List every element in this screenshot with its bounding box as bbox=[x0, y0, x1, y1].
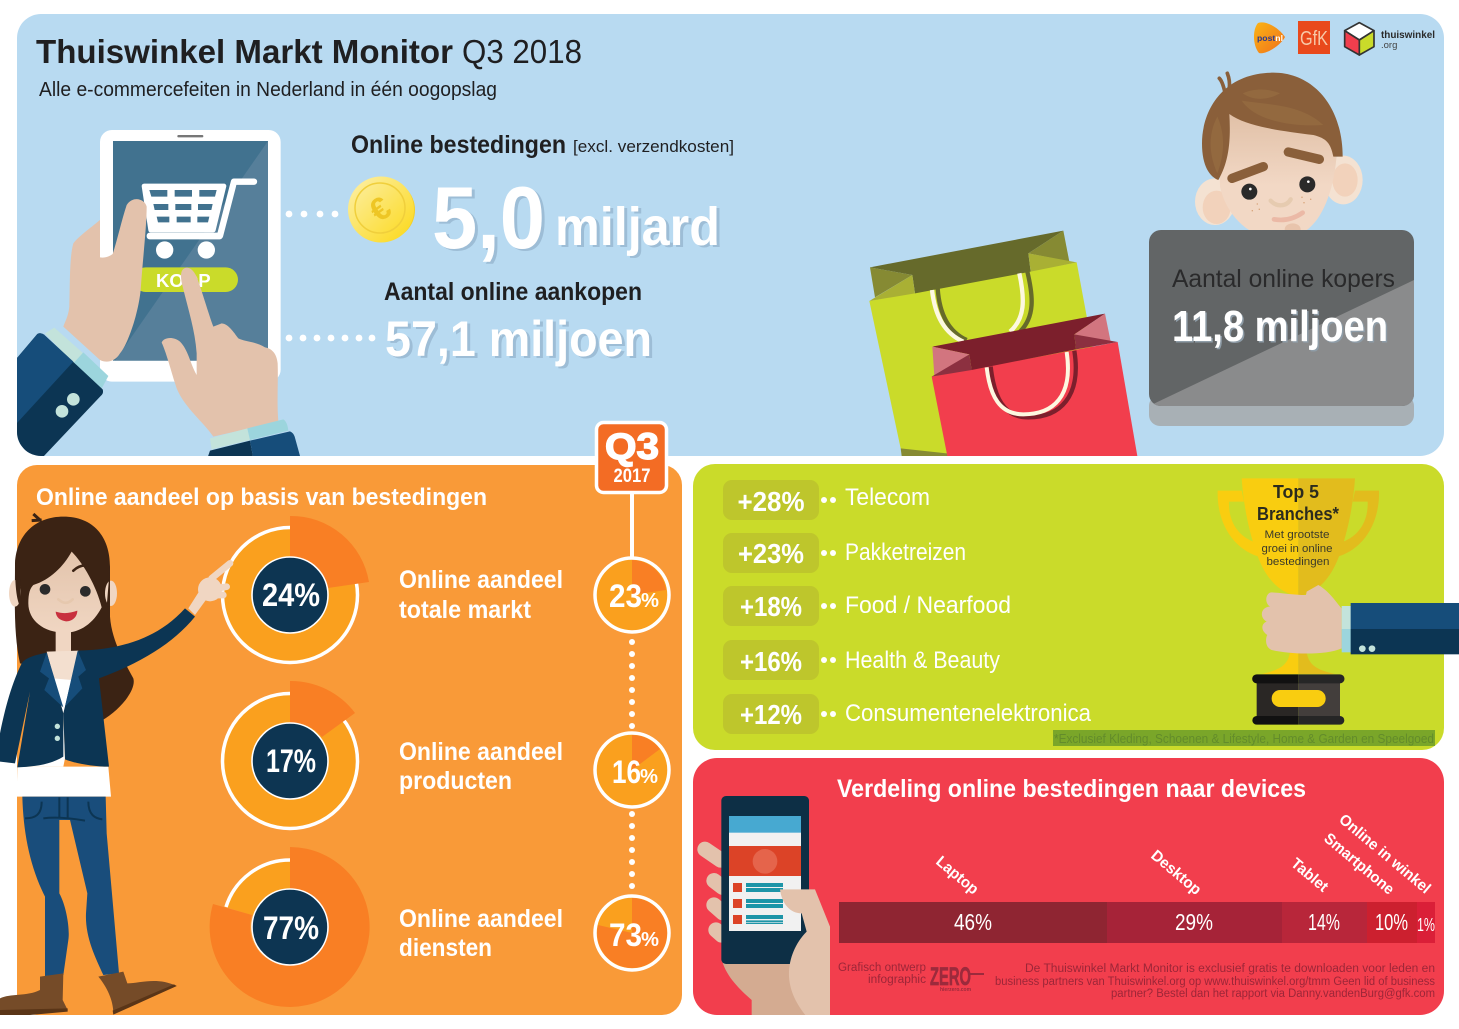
axis label: desktop: Desktop bbox=[1147, 847, 1204, 899]
trophy heading: Top 5 bbox=[1273, 482, 1319, 502]
donut: totale markt bbox=[222, 516, 369, 662]
subtitle: Alle e-commercefeiten in Nederland in één oogopslag bbox=[39, 79, 497, 101]
trophy subtext: groei in online bbox=[1262, 543, 1332, 555]
pie: 2017 totale markt bbox=[595, 558, 669, 632]
row: telecom: +28% bbox=[738, 486, 805, 517]
logo: Thuiswinkel.org: thuiswinkel bbox=[1381, 29, 1435, 41]
heading: online bestedingen: Online bestedingen bbox=[351, 131, 566, 159]
footer note: business partners van Thuiswinkel.org op www.thuiswinkel.org/tmm Geen lid of business bbox=[995, 976, 1435, 988]
footer note bbox=[995, 963, 1435, 1000]
label: aantal online kopers: Aantal online kopers bbox=[1172, 265, 1395, 293]
illustration: hands holding tablet: KOOP bbox=[156, 270, 211, 291]
pie: 2017 producten: 16 bbox=[612, 754, 641, 790]
connector dots: purchases bbox=[286, 335, 375, 341]
pie: 2017 totale markt: % bbox=[641, 590, 659, 612]
credit: design: Grafisch ontwerp bbox=[838, 962, 926, 974]
pie: 2017 diensten: % bbox=[641, 929, 659, 951]
trophy subtext: Met grootste bbox=[1264, 529, 1330, 541]
label: diensten: Online aandeel bbox=[399, 905, 563, 933]
pie: 2017 diensten: 73 bbox=[609, 917, 642, 953]
row: pakketreizen: +23% bbox=[738, 538, 804, 569]
pie: 2017 producten: % bbox=[640, 766, 658, 788]
credit: design: infographic bbox=[868, 974, 926, 986]
label: totale markt bbox=[399, 566, 563, 624]
axis label: laptop: Laptop bbox=[932, 853, 982, 898]
logo: Thuiswinkel.org bbox=[1345, 23, 1435, 55]
footer note: De Thuiswinkel Markt Monitor is exclusief gratis te downloaden voor leden en bbox=[1025, 963, 1435, 975]
illustration: shopping bags bbox=[869, 231, 1137, 456]
panel: top summary bbox=[17, 14, 1444, 458]
value: in-store: 1% bbox=[1417, 915, 1435, 935]
row: electronics bbox=[723, 694, 1091, 734]
stacked bar bbox=[839, 902, 1435, 943]
trophy heading: Branches* bbox=[1257, 504, 1339, 524]
logo: PostNL bbox=[1254, 22, 1285, 53]
row: electronics: +12% bbox=[740, 699, 802, 730]
illustration: trophy held by hand bbox=[1218, 478, 1459, 725]
panel: online share bbox=[17, 422, 682, 1015]
illustration: hands holding tablet bbox=[17, 130, 301, 458]
heading: aantal online aankopen: Aantal online aankopen bbox=[384, 278, 642, 306]
label: totale markt: totale markt bbox=[399, 596, 532, 624]
row: health: Health & Beauty bbox=[845, 647, 1001, 674]
heading: online bestedingen bbox=[351, 131, 734, 159]
donut: diensten: 77% bbox=[263, 910, 319, 946]
axis label: tablet: Tablet bbox=[1287, 855, 1331, 896]
illustration: woman pointing bbox=[0, 514, 230, 1015]
row: pakketreizen: Pakketreizen bbox=[845, 539, 966, 566]
title: Thuiswinkel Markt Monitor bbox=[36, 33, 453, 70]
stat: 57,1 miljoen: 57,1 miljoen bbox=[385, 311, 652, 367]
donut: producten: 17% bbox=[266, 743, 316, 779]
label: totale markt: Online aandeel bbox=[399, 566, 563, 594]
stat: 5,0 miljard: 5,0 bbox=[432, 168, 545, 267]
row: food bbox=[723, 586, 1011, 626]
donut: producten bbox=[222, 681, 358, 828]
value: desktop: 29% bbox=[1175, 909, 1213, 935]
timeline connector bbox=[629, 492, 635, 889]
row: telecom: Telecom bbox=[845, 484, 930, 511]
donut: diensten bbox=[210, 847, 370, 1007]
pie: 2017 totale markt: 23 bbox=[609, 578, 642, 614]
panel: top 5 sectors bbox=[693, 464, 1459, 750]
label: diensten: diensten bbox=[399, 934, 492, 962]
badge: Q3 2017: 2017 bbox=[614, 466, 650, 487]
trophy heading bbox=[1257, 482, 1339, 524]
connector dots: spend bbox=[286, 211, 338, 217]
value: laptop: 46% bbox=[954, 909, 992, 935]
heading: devices: Verdeling online bestedingen naar devices bbox=[837, 775, 1306, 803]
logo: PostNL: postnl bbox=[1257, 33, 1283, 43]
illustration: hand holding phone bbox=[705, 796, 830, 1017]
trophy subtext: bestedingen bbox=[1266, 556, 1330, 568]
row: food: +18% bbox=[740, 591, 802, 622]
trophy subtext bbox=[1262, 529, 1332, 568]
row: health: +16% bbox=[740, 646, 802, 677]
credit: design bbox=[838, 962, 926, 986]
stat: 5,0 miljard: miljard bbox=[555, 197, 720, 257]
pie: 2017 diensten bbox=[595, 896, 669, 970]
row: food: Food / Nearfood bbox=[845, 592, 1011, 619]
row: health bbox=[723, 640, 1001, 680]
value: smartphone: 10% bbox=[1375, 909, 1408, 935]
heading: online bestedingen: [excl. verzendkosten] bbox=[573, 137, 734, 156]
row: telecom bbox=[723, 480, 930, 520]
panel: devices bbox=[693, 758, 1444, 1017]
logo: Thuiswinkel.org: .org bbox=[1381, 40, 1397, 51]
badge: Q3 2017 bbox=[596, 422, 666, 492]
value: tablet: 14% bbox=[1308, 909, 1340, 935]
axis label: online in winkel: Online in winkel bbox=[1335, 811, 1434, 897]
icon: euro coin bbox=[348, 176, 415, 242]
label: producten: Online aandeel bbox=[399, 738, 563, 766]
illustration: boy behind laptop bbox=[1195, 73, 1363, 238]
footer note: partner? Bestel dan het rapport via Danny.vandenBurg@gfk.com bbox=[1111, 988, 1435, 1000]
stat: 11,8 miljoen: 11,8 miljoen bbox=[1172, 302, 1388, 351]
title quarter: Q3 2018 bbox=[462, 33, 582, 70]
logo: GfK bbox=[1298, 21, 1330, 54]
pie: 2017 producten bbox=[595, 733, 669, 807]
label: diensten bbox=[399, 905, 563, 962]
heading: online aandeel: Online aandeel op basis van bestedingen bbox=[36, 484, 487, 511]
badge: Q3 2017: Q3 bbox=[605, 426, 659, 467]
laptop: online buyers bbox=[1149, 230, 1414, 426]
row: pakketreizen bbox=[723, 533, 966, 573]
logo: GfK: GfK bbox=[1300, 28, 1329, 50]
logo: ZERO: hierzero.com bbox=[940, 987, 972, 993]
donut: totale markt: 24% bbox=[262, 577, 320, 613]
label: producten: producten bbox=[399, 767, 512, 795]
axis label: smartphone: Smartphone bbox=[1320, 830, 1398, 899]
logo: ZERO: ZERO bbox=[930, 963, 971, 991]
stat: 5,0 miljard bbox=[432, 168, 720, 267]
row: electronics: Consumentenelektronica bbox=[845, 700, 1091, 727]
icon: euro coin: € bbox=[362, 189, 398, 229]
label: producten bbox=[399, 738, 563, 795]
